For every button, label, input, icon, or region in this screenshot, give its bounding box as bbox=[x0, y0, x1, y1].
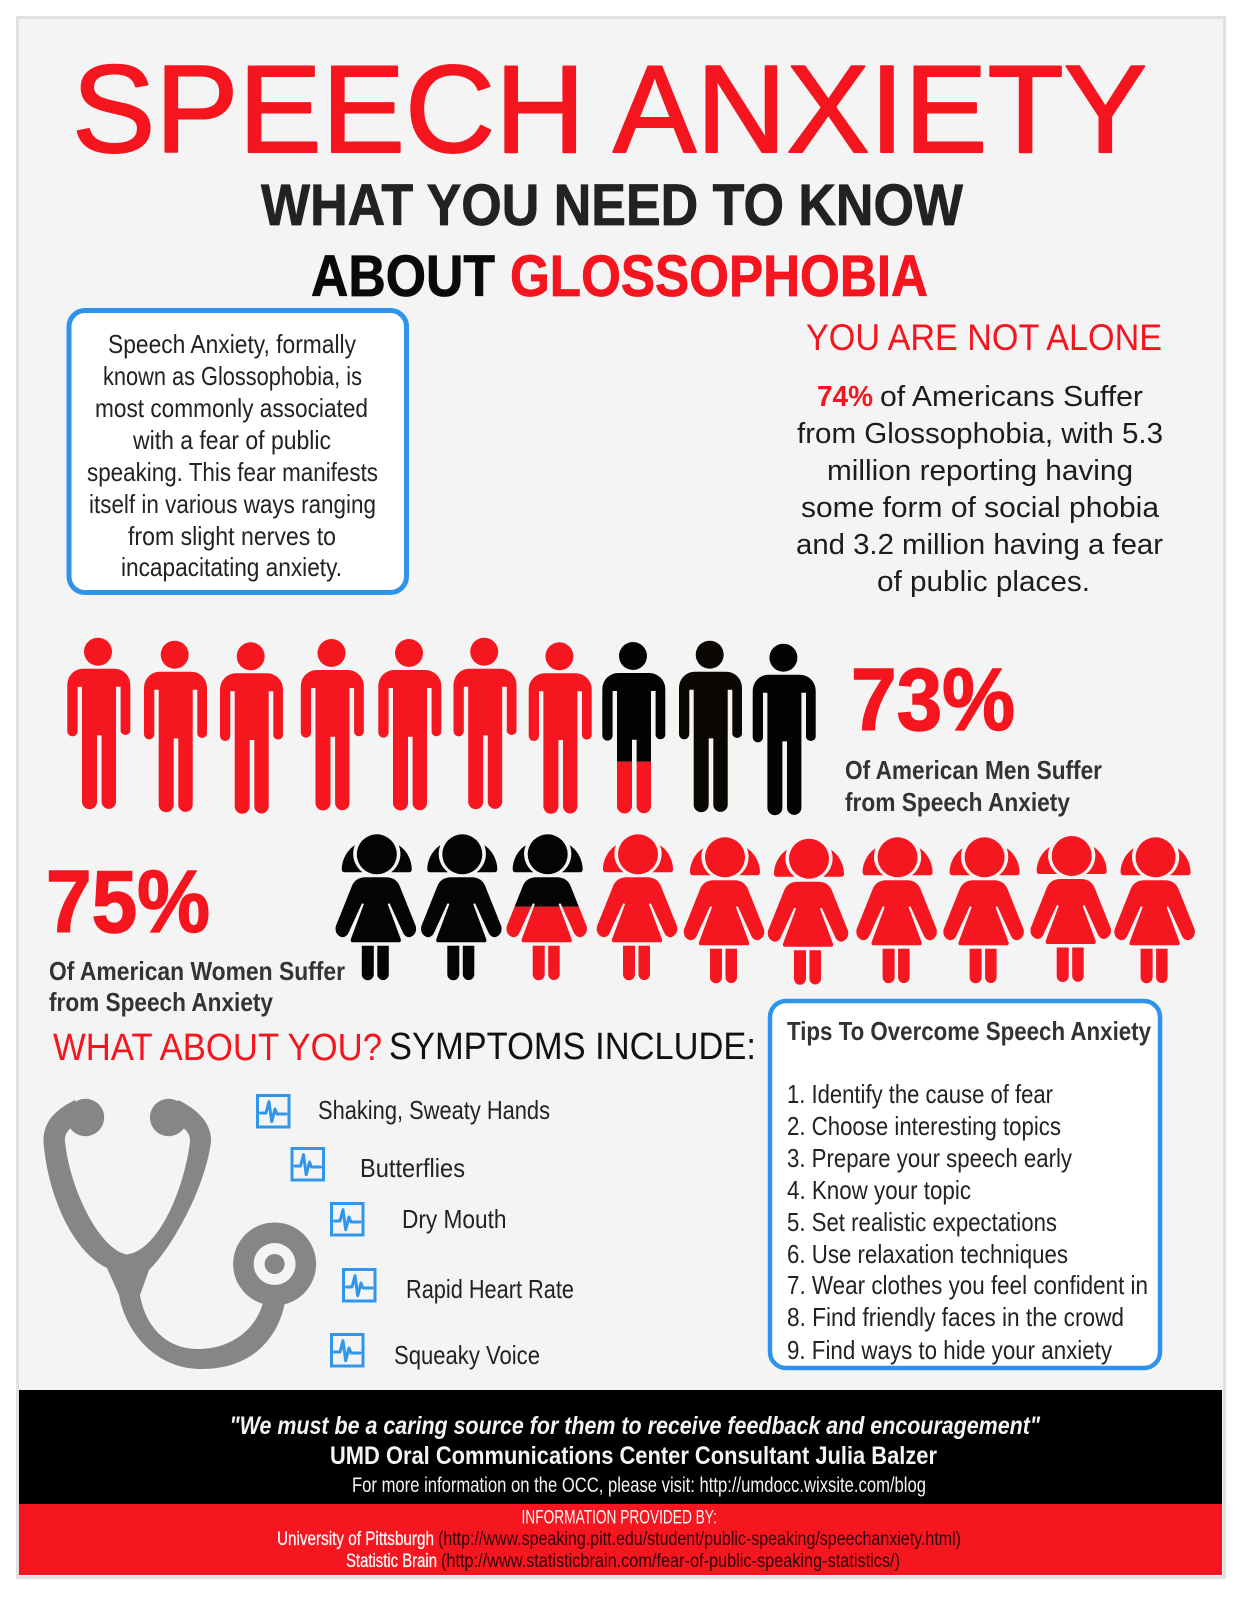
text block: definition: known as Glossophobia, is bbox=[103, 361, 362, 391]
list: tips: 2. Choose interesting topics bbox=[787, 1111, 1061, 1141]
symptom: shaking bbox=[258, 1095, 550, 1127]
heading: symptoms include: SYMPTOMS INCLUDE: bbox=[389, 1026, 756, 1068]
symptom: rapid heart rate: Rapid Heart Rate bbox=[406, 1274, 574, 1304]
list: tips: 7. Wear clothes you feel confident in bbox=[787, 1270, 1148, 1300]
text block: statistics: 74% bbox=[817, 381, 873, 413]
list: tips bbox=[787, 1079, 1148, 1365]
caption: men bbox=[845, 755, 1102, 817]
symptom: squeaky voice bbox=[332, 1334, 540, 1370]
text block: definition: speaking. This fear manifests bbox=[87, 457, 378, 487]
subtitle: second line: GLOSSOPHOBIA bbox=[510, 244, 928, 309]
caption: women bbox=[49, 956, 345, 1017]
text block: statistics: of public places. bbox=[877, 566, 1090, 598]
source: university of pittsburgh bbox=[277, 1529, 961, 1550]
caption: men: from Speech Anxiety bbox=[845, 787, 1070, 817]
source: university of pittsburgh: (http://www.speaking.pitt.edu/student/public-speaking/speechanxiety.html) bbox=[438, 1529, 961, 1550]
text block: statistics: of Americans Suffer bbox=[880, 381, 1143, 413]
symptom: dry mouth bbox=[332, 1204, 506, 1235]
caption: women: from Speech Anxiety bbox=[49, 987, 273, 1017]
stat: 73 percent: 73% bbox=[851, 650, 1015, 749]
panel: tips bbox=[770, 1001, 1160, 1368]
title: SPEECH ANXIETY bbox=[72, 41, 1147, 179]
heading: tips: Tips To Overcome Speech Anxiety bbox=[787, 1016, 1151, 1046]
symptom: butterflies: Butterflies bbox=[360, 1153, 465, 1183]
chart: women pictogram bbox=[336, 834, 1195, 985]
more information link: For more information on the OCC, please visit: http://umdocc.wixsite.com/blog bbox=[352, 1474, 926, 1497]
subtitle: second line: ABOUT bbox=[311, 244, 495, 309]
text block: definition: itself in various ways ranging bbox=[89, 489, 376, 519]
symptom: butterflies bbox=[292, 1148, 465, 1183]
symptom: shaking: Shaking, Sweaty Hands bbox=[318, 1095, 550, 1125]
sources heading: INFORMATION PROVIDED BY: bbox=[522, 1508, 717, 1528]
subtitle: first line: WHAT YOU NEED TO KNOW bbox=[261, 173, 963, 238]
heading: you are not alone: YOU ARE NOT ALONE bbox=[806, 317, 1162, 358]
caption: women: Of American Women Suffer bbox=[49, 956, 345, 986]
symptom: dry mouth: Dry Mouth bbox=[402, 1204, 506, 1234]
caption: men: Of American Men Suffer bbox=[845, 755, 1102, 785]
symptom: rapid heart rate bbox=[344, 1270, 574, 1304]
list: tips: 8. Find friendly faces in the crowd bbox=[787, 1302, 1124, 1332]
list: tips: 6. Use relaxation techniques bbox=[787, 1239, 1068, 1269]
source: university of pittsburgh: University of Pittsburgh bbox=[277, 1529, 434, 1550]
text block: definition: with a fear of public bbox=[132, 425, 331, 455]
text block: definition: incapacitating anxiety. bbox=[121, 552, 342, 582]
text block: statistics: from Glossophobia, with 5.3 bbox=[797, 418, 1163, 450]
attribution: UMD Oral Communications Center Consultant Julia Balzer bbox=[330, 1442, 937, 1470]
panel: definition box bbox=[69, 310, 406, 592]
text block: statistics: and 3.2 million having a fear bbox=[796, 529, 1163, 561]
icon: stethoscope bbox=[43, 1099, 316, 1369]
source: statistic brain: (http://www.statisticbrain.com/fear-of-public-speaking-statistics/) bbox=[441, 1551, 900, 1572]
text block: definition: most commonly associated bbox=[95, 393, 368, 423]
heading: what about you: WHAT ABOUT YOU? bbox=[53, 1027, 382, 1069]
panel: quote band bbox=[19, 1390, 1222, 1504]
text block: definition: from slight nerves to bbox=[128, 521, 336, 551]
subtitle: second line bbox=[311, 244, 928, 309]
text block: statistics bbox=[796, 381, 1163, 598]
text block: definition bbox=[87, 329, 378, 582]
quote: "We must be a caring source for them to receive feedback and encouragement" bbox=[230, 1412, 1041, 1440]
chart: men pictogram bbox=[67, 638, 816, 815]
list: tips: 4. Know your topic bbox=[787, 1175, 971, 1205]
stat: 75 percent: 75% bbox=[46, 852, 210, 951]
list: tips: 1. Identify the cause of fear bbox=[787, 1079, 1053, 1109]
text block: statistics: million reporting having bbox=[827, 455, 1133, 487]
source: statistic brain: Statistic Brain bbox=[346, 1551, 437, 1572]
list: tips: 9. Find ways to hide your anxiety bbox=[787, 1335, 1112, 1365]
text block: definition: Speech Anxiety, formally bbox=[108, 329, 356, 359]
symptom: squeaky voice: Squeaky Voice bbox=[394, 1340, 540, 1370]
list: tips: 3. Prepare your speech early bbox=[787, 1143, 1072, 1173]
list: tips: 5. Set realistic expectations bbox=[787, 1207, 1057, 1237]
panel: sources band bbox=[19, 1504, 1222, 1575]
text block: statistics: some form of social phobia bbox=[801, 492, 1160, 524]
